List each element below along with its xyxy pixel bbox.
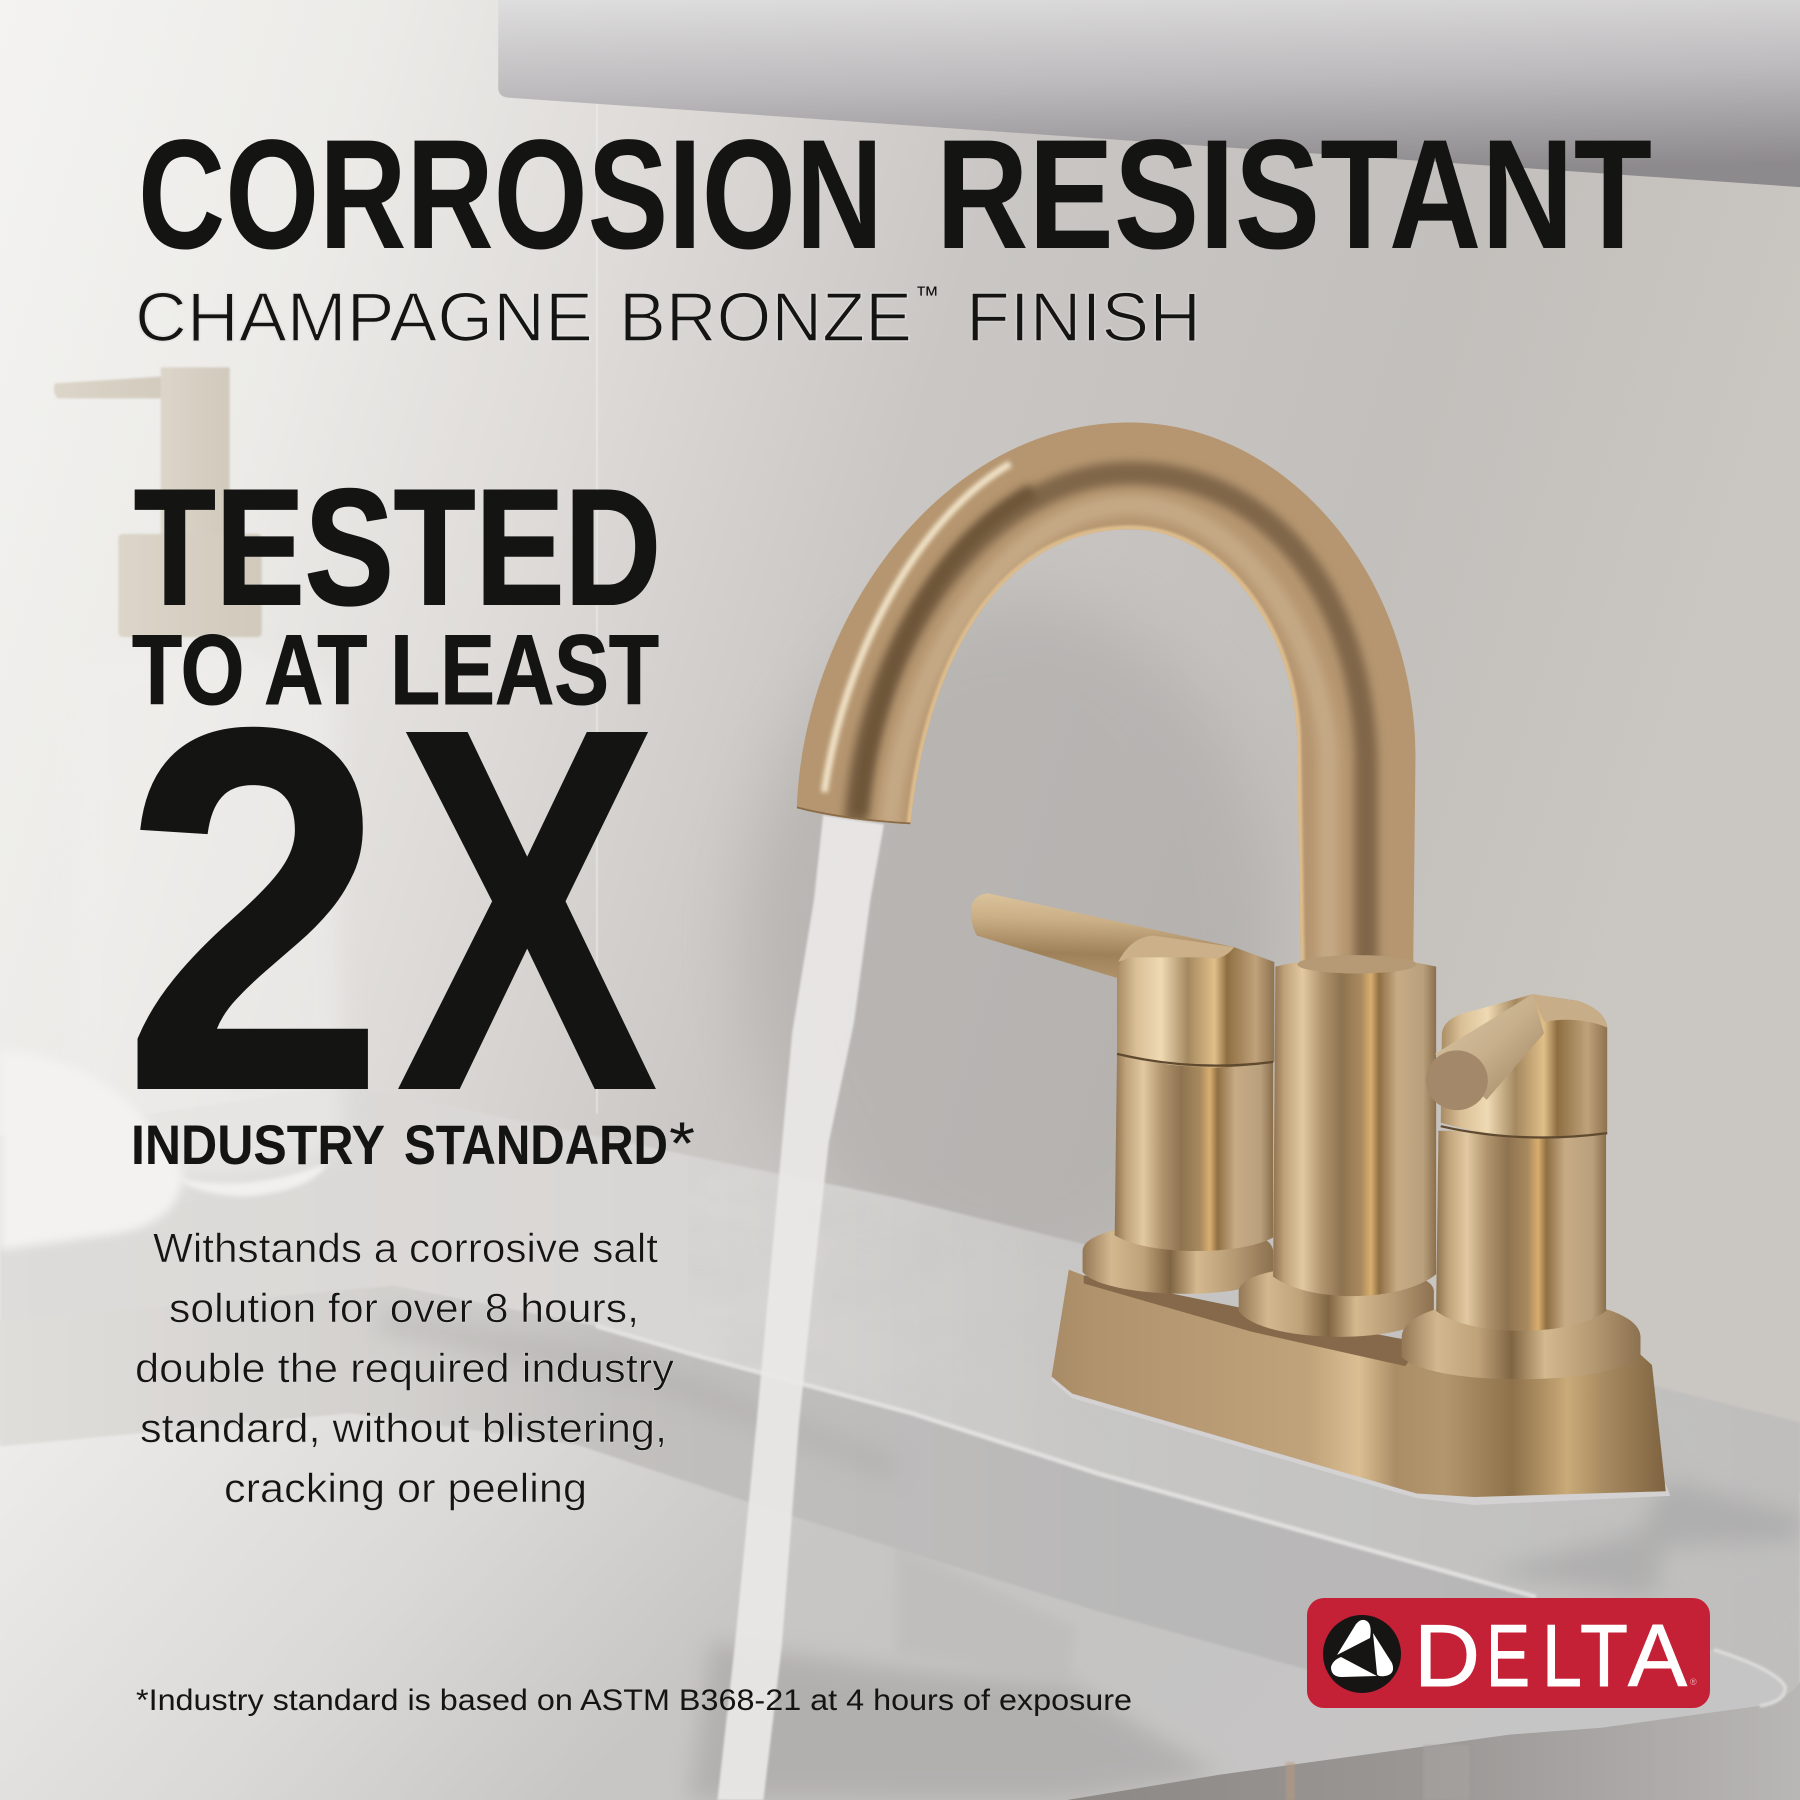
basin bottom reflective [1066, 1682, 1800, 1800]
subheading: finish: CHAMPAGNE [135, 278, 593, 356]
body text: Withstands a corrosive salt [153, 1225, 659, 1271]
body text: standard, without blistering, [140, 1405, 667, 1451]
right lever end [1426, 1050, 1488, 1110]
left flange [1083, 1224, 1273, 1294]
headline: 2X: 2 [122, 622, 386, 1198]
left lever [971, 893, 1234, 987]
reflections in basin [1286, 1745, 1469, 1800]
center column [1273, 957, 1436, 1296]
subheading: finish: BRONZE [619, 278, 912, 356]
wall shading near faucet [746, 597, 1274, 1286]
basin inner wall shading [689, 1642, 1219, 1800]
faucet reflection shadow [1484, 1480, 1800, 1597]
heading: CORROSION RESISTANT: RESISTANT [936, 108, 1652, 282]
left handle cap [1117, 947, 1274, 1068]
heading: CORROSION RESISTANT [138, 108, 1652, 282]
headline: INDUSTRY STANDARD: * [669, 1110, 695, 1177]
heading: CORROSION RESISTANT: CORROSION [138, 108, 883, 282]
wall tile seam [596, 103, 598, 1114]
right lever [1435, 994, 1544, 1100]
subheading: finish: ™ [915, 282, 939, 309]
white bottle of dispenser [69, 651, 344, 1180]
subheading: finish: FINISH [966, 278, 1201, 356]
footnote: *Industry standard is based on ASTM B368-21 at 4 hours of exposure [136, 1684, 1132, 1717]
left cap top face [1118, 936, 1234, 962]
headline: 2X [122, 622, 660, 1198]
wordmark: T [1580, 1606, 1628, 1705]
faucet [781, 402, 1670, 1505]
headline: 2X: X [396, 622, 660, 1198]
left handle lower cylinder [1115, 1055, 1273, 1251]
faucet part lines [1117, 1054, 1607, 1137]
basin corner [895, 1544, 1077, 1683]
bowl by towel [176, 1162, 329, 1196]
sink rim right [1714, 1650, 1785, 1706]
icon: delta symbol [1323, 1615, 1401, 1693]
wordmark: L [1542, 1606, 1582, 1705]
body text [135, 1225, 675, 1511]
counter highlight line [596, 1326, 1536, 1597]
wordmark [1414, 1606, 1687, 1705]
soap dispenser pump [54, 367, 262, 637]
right handle cap [1441, 994, 1607, 1138]
deck plate [1052, 1270, 1666, 1497]
headline: INDUSTRY STANDARD [131, 1110, 695, 1177]
body text: solution for over 8 hours, [169, 1285, 639, 1331]
right flange [1402, 1299, 1640, 1379]
right handle lower cylinder [1436, 1131, 1606, 1331]
center column rim [1297, 955, 1417, 974]
body text: double the required industry [135, 1345, 675, 1391]
subheading: finish [135, 278, 1201, 356]
headline: INDUSTRY STANDARD: INDUSTRY [131, 1113, 385, 1176]
headline: TO AT LEAST: TO AT LEAST [132, 614, 659, 725]
counter marble mottling [689, 1148, 1800, 1800]
center flange [1239, 1266, 1434, 1337]
headline: TESTED: TESTED [134, 455, 661, 639]
marble counter top [0, 1085, 1800, 1800]
sink basin [0, 1410, 1785, 1800]
registered mark: ® [1690, 1677, 1697, 1687]
counter edge shading [379, 1320, 895, 1469]
wordmark: A [1628, 1606, 1687, 1705]
water stream [718, 815, 884, 1800]
wordmark: D [1414, 1606, 1480, 1705]
deck plate gasket [1052, 1374, 1670, 1505]
wordmark: E [1486, 1606, 1530, 1705]
body text: cracking or peeling [224, 1465, 587, 1511]
logo: Delta [1307, 1598, 1710, 1708]
right cap top [1533, 994, 1607, 1027]
spout [796, 422, 1416, 962]
towel [0, 1050, 183, 1250]
headline: INDUSTRY STANDARD: STANDARD [404, 1113, 668, 1176]
mirror [498, 0, 1800, 187]
deck plate top face [1084, 1275, 1424, 1366]
counter front edge face [0, 1286, 1630, 1693]
